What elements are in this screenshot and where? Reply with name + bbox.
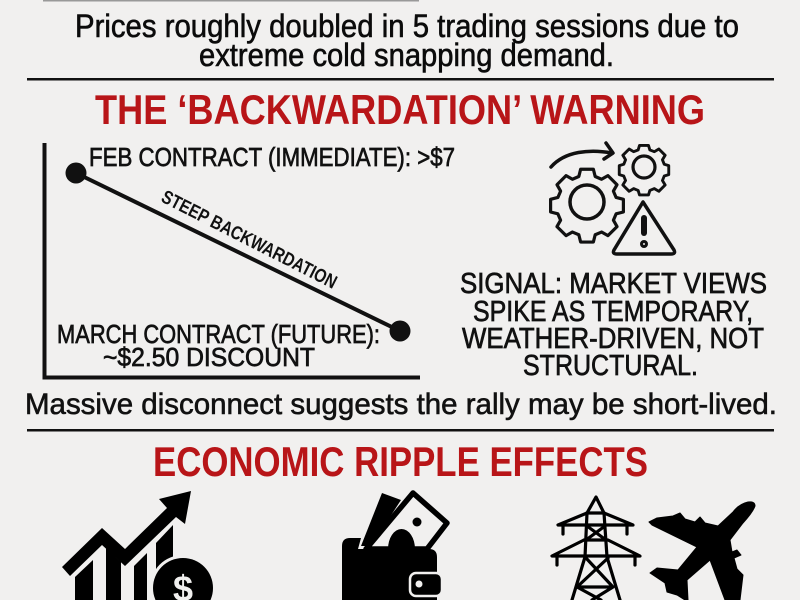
label: march contract: MARCH CONTRACT (FUTURE): xyxy=(57,319,380,349)
heading: the backwardation warning: THE ‘BACKWARDATION’ WARNING xyxy=(95,86,705,133)
intro text: extreme cold snapping demand. xyxy=(199,37,614,73)
signal text: WEATHER-DRIVEN, NOT xyxy=(462,323,764,355)
chart: backwardation slope xyxy=(44,142,455,378)
signal text: STRUCTURAL. xyxy=(523,350,698,382)
icon: rising chart with dollar coin xyxy=(62,491,216,600)
icon: electricity pylon xyxy=(552,497,640,600)
curved arrow xyxy=(551,143,613,167)
label: march contract: ~$2.50 DISCOUNT xyxy=(103,342,315,372)
signal text: SPIKE AS TEMPORARY, xyxy=(473,296,753,328)
intro text xyxy=(75,8,739,73)
large gear xyxy=(551,169,623,242)
small gear xyxy=(619,145,669,195)
label: steep backwardation: STEEP BACKWARDATION xyxy=(158,187,340,294)
label: march contract xyxy=(57,319,380,372)
intro text: Prices roughly doubled in 5 trading sessions due to xyxy=(75,8,739,44)
heading: economic ripple effects: ECONOMIC RIPPLE EFFECTS xyxy=(153,438,648,485)
signal text: SIGNAL: MARKET VIEWS xyxy=(460,268,767,300)
icon: wallet with cash xyxy=(342,493,447,600)
label: feb contract: FEB CONTRACT (IMMEDIATE): >$7 xyxy=(89,142,455,172)
trend line with contract points xyxy=(66,162,410,342)
signal text xyxy=(460,268,767,382)
icon: gears, arrow and warning triangle xyxy=(551,143,675,254)
icon: airplane xyxy=(649,502,755,600)
takeaway text: Massive disconnect suggests the rally may be short-lived. xyxy=(25,388,777,421)
chart axes xyxy=(44,143,420,378)
warning triangle xyxy=(613,202,675,254)
